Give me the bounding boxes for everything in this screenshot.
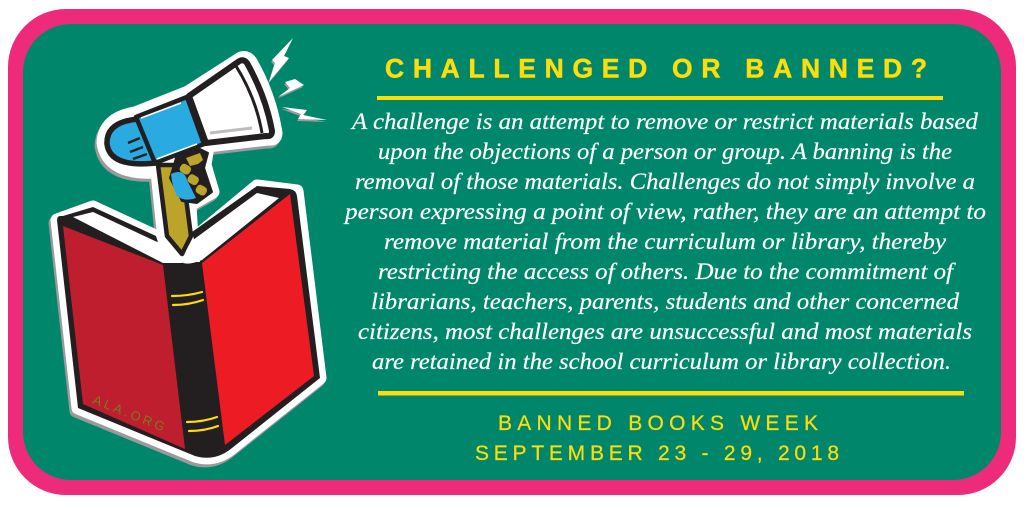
- book black silhouette: [57, 186, 320, 458]
- body text: remove material from the curriculum or library, thereby: [384, 229, 947, 255]
- body highlights: [141, 103, 197, 159]
- left page: [73, 212, 183, 263]
- ala.org text: ALA.ORG: [91, 392, 167, 434]
- body text: restricting the access of others. Due to the commitment of: [378, 259, 957, 285]
- horn shade: [210, 128, 252, 133]
- body text: person expressing a point of view, rather, they are an attempt to: [343, 199, 986, 225]
- body text: are retained in the school curriculum or library collection.: [372, 349, 951, 375]
- hand silhouette: [170, 148, 212, 203]
- body text: citizens, most challenges are unsuccessful and most materials: [358, 319, 972, 345]
- horn: [189, 60, 272, 143]
- vent lines: [128, 138, 147, 159]
- bottom rule: [378, 391, 964, 396]
- icon: lightning bolts: [268, 38, 327, 122]
- top rule: [377, 96, 943, 100]
- hand grip: [171, 172, 196, 200]
- megaphone handle and hand: [158, 148, 212, 254]
- right page: [183, 193, 279, 264]
- megaphone: [107, 60, 272, 164]
- footer event name: BANNED BOOKS WEEK: [498, 412, 818, 435]
- body text: [343, 109, 986, 375]
- body text: A challenge is an attempt to remove or restrict materials based: [350, 109, 978, 135]
- sticker white outline: [57, 58, 320, 458]
- sticker outline shadow: [55, 60, 318, 461]
- handle: [158, 165, 191, 254]
- book: [57, 186, 320, 458]
- body text: librarians, teachers, parents, students and other concerned: [371, 289, 959, 315]
- spine bands: [172, 292, 218, 431]
- body text: removal of those materials. Challenges do not simply involve a: [355, 169, 975, 195]
- back cap: [107, 119, 156, 164]
- footer dates: SEPTEMBER 23 - 29, 2018: [475, 442, 839, 465]
- horn inner rim: [236, 66, 262, 133]
- illustration: megaphone and book: [55, 38, 327, 461]
- right cover: [202, 194, 314, 445]
- left cover: [63, 226, 185, 449]
- fingers: [178, 153, 208, 197]
- blue body: [136, 97, 204, 163]
- body text: upon the objections of a person or group. A banning is the: [378, 139, 952, 165]
- heading: CHALLENGED OR BANNED?: [385, 54, 927, 84]
